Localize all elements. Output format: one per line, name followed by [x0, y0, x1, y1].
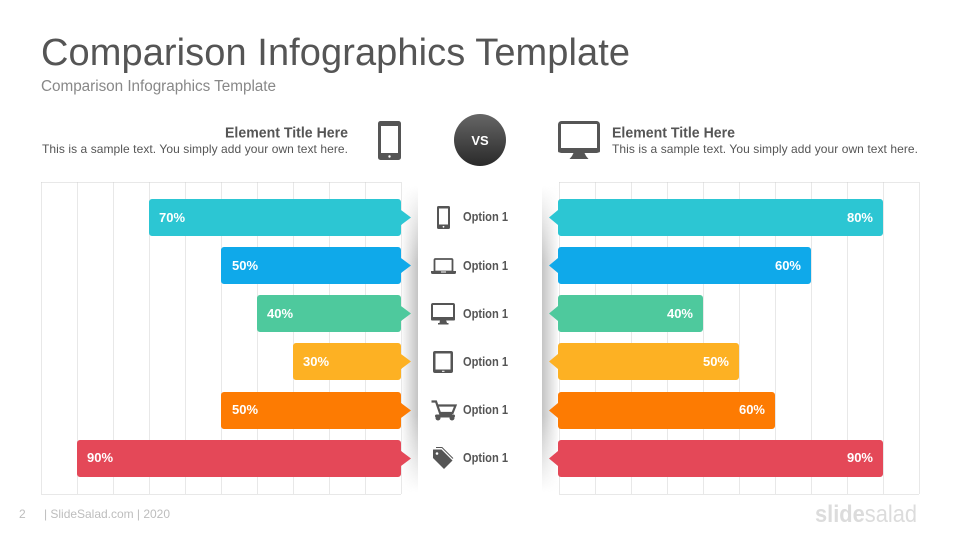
option: tag — [433, 448, 508, 469]
option: laptop: Option 1 — [463, 259, 508, 273]
option: tablet — [433, 351, 508, 373]
left element heading — [42, 126, 348, 156]
left bar chart — [77, 199, 411, 477]
VS badge — [454, 114, 506, 166]
option: phone: Option 1 — [463, 210, 508, 224]
right element heading — [612, 126, 918, 156]
bar: right 80% — [549, 199, 883, 236]
option: monitor — [431, 304, 508, 324]
logo: slidesalad: slidesalad — [815, 501, 917, 528]
bar: left 90%: 90% — [87, 450, 113, 465]
left element heading: This is a sample text. You simply add your own text here. — [42, 142, 348, 156]
bar: left 40% — [257, 295, 411, 332]
option: monitor: Option 1 — [463, 307, 508, 321]
bar: left 50% orange: 50% — [232, 402, 258, 417]
center panel shadows — [402, 186, 558, 492]
option: cart — [432, 402, 508, 420]
option: cart: Option 1 — [463, 403, 508, 417]
bar: left 50% blue — [221, 247, 411, 284]
bar: right 90%: 90% — [847, 450, 873, 465]
right element heading: This is a sample text. You simply add your own text here. — [612, 142, 918, 156]
option: tag: Option 1 — [463, 451, 508, 465]
bar: right 50% yellow: 50% — [703, 354, 729, 369]
bar: left 30% — [293, 343, 411, 380]
footer text: | SlideSalad.com | 2020 — [44, 507, 170, 521]
page number: 2 — [19, 507, 26, 521]
bar: right 80%: 80% — [847, 210, 873, 225]
bar: right 60% orange: 60% — [739, 402, 765, 417]
icon: phone left — [378, 121, 401, 160]
bar: left 50% orange — [221, 392, 411, 429]
VS badge: VS — [471, 133, 489, 148]
icon: monitor right — [558, 122, 600, 159]
bar: right 60% blue: 60% — [775, 258, 801, 273]
bar: right 60% orange — [549, 392, 775, 429]
bar: right 40%: 40% — [667, 306, 693, 321]
bar: right 50% yellow — [549, 343, 739, 380]
option: phone — [437, 206, 508, 229]
bar: right 60% blue — [549, 247, 811, 284]
right chart grid — [560, 182, 920, 494]
bar: right 40% — [549, 295, 703, 332]
title: Comparison Infographics Template — [41, 32, 630, 74]
left element heading: Element Title Here — [225, 126, 348, 142]
right element heading: Element Title Here — [612, 126, 735, 142]
bar: left 40%: 40% — [267, 306, 293, 321]
right bar chart — [549, 199, 883, 477]
option: laptop — [431, 259, 508, 274]
bar: left 50% blue: 50% — [232, 258, 258, 273]
bar: left 90% — [77, 440, 411, 477]
bar: left 70% — [149, 199, 411, 236]
bar: right 90% — [549, 440, 883, 477]
option: tablet: Option 1 — [463, 355, 508, 369]
bar: left 30%: 30% — [303, 354, 329, 369]
subtitle: Comparison Infographics Template — [41, 78, 276, 95]
option list — [431, 206, 508, 469]
bar: left 70%: 70% — [159, 210, 185, 225]
left chart grid — [42, 182, 402, 494]
